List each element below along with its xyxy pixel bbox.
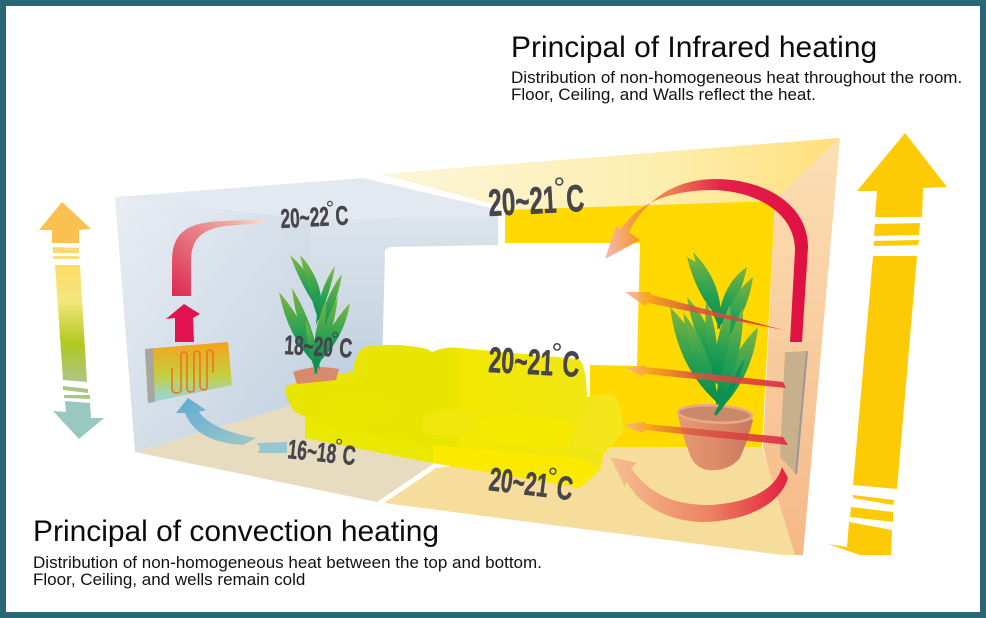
temperature: 18~20°C: ° bbox=[330, 328, 340, 352]
temperature: 18~20°C: 18~20 bbox=[284, 329, 334, 362]
plant pot bbox=[293, 367, 339, 384]
temperature: 20~22°C: ° bbox=[325, 197, 335, 221]
temperature: 20~21°C middle: ° bbox=[550, 337, 563, 369]
temperature: 20~21°C middle bbox=[488, 334, 581, 385]
radiator bbox=[145, 342, 232, 403]
text: infrared description: Distribution of non-homogeneous heat throughout the room. bbox=[511, 68, 962, 87]
text: infrared description bbox=[511, 68, 962, 104]
bottom peach arc arrow bbox=[610, 457, 788, 522]
top red arc arrow bbox=[605, 179, 808, 342]
temperature: 20~22°C: C bbox=[335, 200, 349, 231]
temperature: 16~18°C: C bbox=[341, 440, 357, 471]
left room: ceiling bbox=[115, 178, 500, 219]
text: convection description: Floor, Ceiling, and wells remain cold bbox=[33, 570, 305, 589]
temperature: 20~21°C floor: 20~21 bbox=[487, 460, 550, 504]
temperature: 20~21°C ceiling bbox=[487, 171, 585, 225]
infrared wall panel bbox=[780, 351, 808, 475]
text: convection description: Distribution of non-homogeneous heat between the top and bottom. bbox=[33, 553, 542, 572]
gradient up-down arrow bbox=[39, 202, 104, 439]
left plant bbox=[279, 255, 350, 384]
heating coil bbox=[172, 350, 213, 393]
flower pot bbox=[678, 358, 753, 470]
title: convection heating: Principal of convection heating bbox=[33, 515, 439, 548]
temperature: 20~21°C ceiling: C bbox=[565, 178, 585, 221]
sofa bbox=[285, 345, 623, 488]
left room: back wall bbox=[310, 216, 498, 402]
curved red convection arrow bbox=[172, 219, 263, 296]
title: infrared heating: Principal of Infrared heating bbox=[511, 31, 877, 64]
right room: floor bbox=[384, 447, 795, 555]
temperature: 20~22°C: 20~22 bbox=[280, 200, 330, 234]
temperature: 20~21°C floor: C bbox=[555, 469, 575, 507]
right room: side wall bbox=[763, 138, 840, 555]
right plant bbox=[670, 252, 758, 470]
temperature: 20~21°C floor: ° bbox=[545, 461, 559, 492]
text: convection description bbox=[33, 553, 542, 589]
right room: back wall bbox=[505, 201, 775, 447]
temperature: 20~21°C ceiling: 20~21 bbox=[487, 178, 558, 224]
temperature: 16~18°C bbox=[286, 430, 358, 471]
temperature: 20~21°C middle: C bbox=[561, 343, 581, 385]
left room: side wall bbox=[115, 197, 310, 452]
temperature: 20~21°C middle: 20~21 bbox=[488, 341, 554, 384]
temperature: 20~22°C bbox=[280, 196, 349, 234]
red up arrow bbox=[166, 304, 200, 342]
temperature: 18~20°C bbox=[284, 326, 353, 364]
temperature: 20~21°C floor bbox=[487, 454, 576, 507]
right room: ceiling bbox=[380, 138, 840, 212]
left room: floor bbox=[135, 403, 436, 502]
temperature: 18~20°C: C bbox=[339, 333, 353, 364]
temperature: 20~21°C ceiling: ° bbox=[553, 172, 567, 206]
text: infrared description: Floor, Ceiling, and Walls reflect the heat. bbox=[511, 85, 816, 104]
blue return arrow bbox=[176, 398, 287, 453]
temperature: 16~18°C: 16~18 bbox=[286, 433, 338, 469]
temperature: 16~18°C: ° bbox=[333, 435, 344, 459]
big yellow up-down arrow bbox=[828, 133, 947, 555]
thin infrared arrows bbox=[624, 292, 788, 445]
